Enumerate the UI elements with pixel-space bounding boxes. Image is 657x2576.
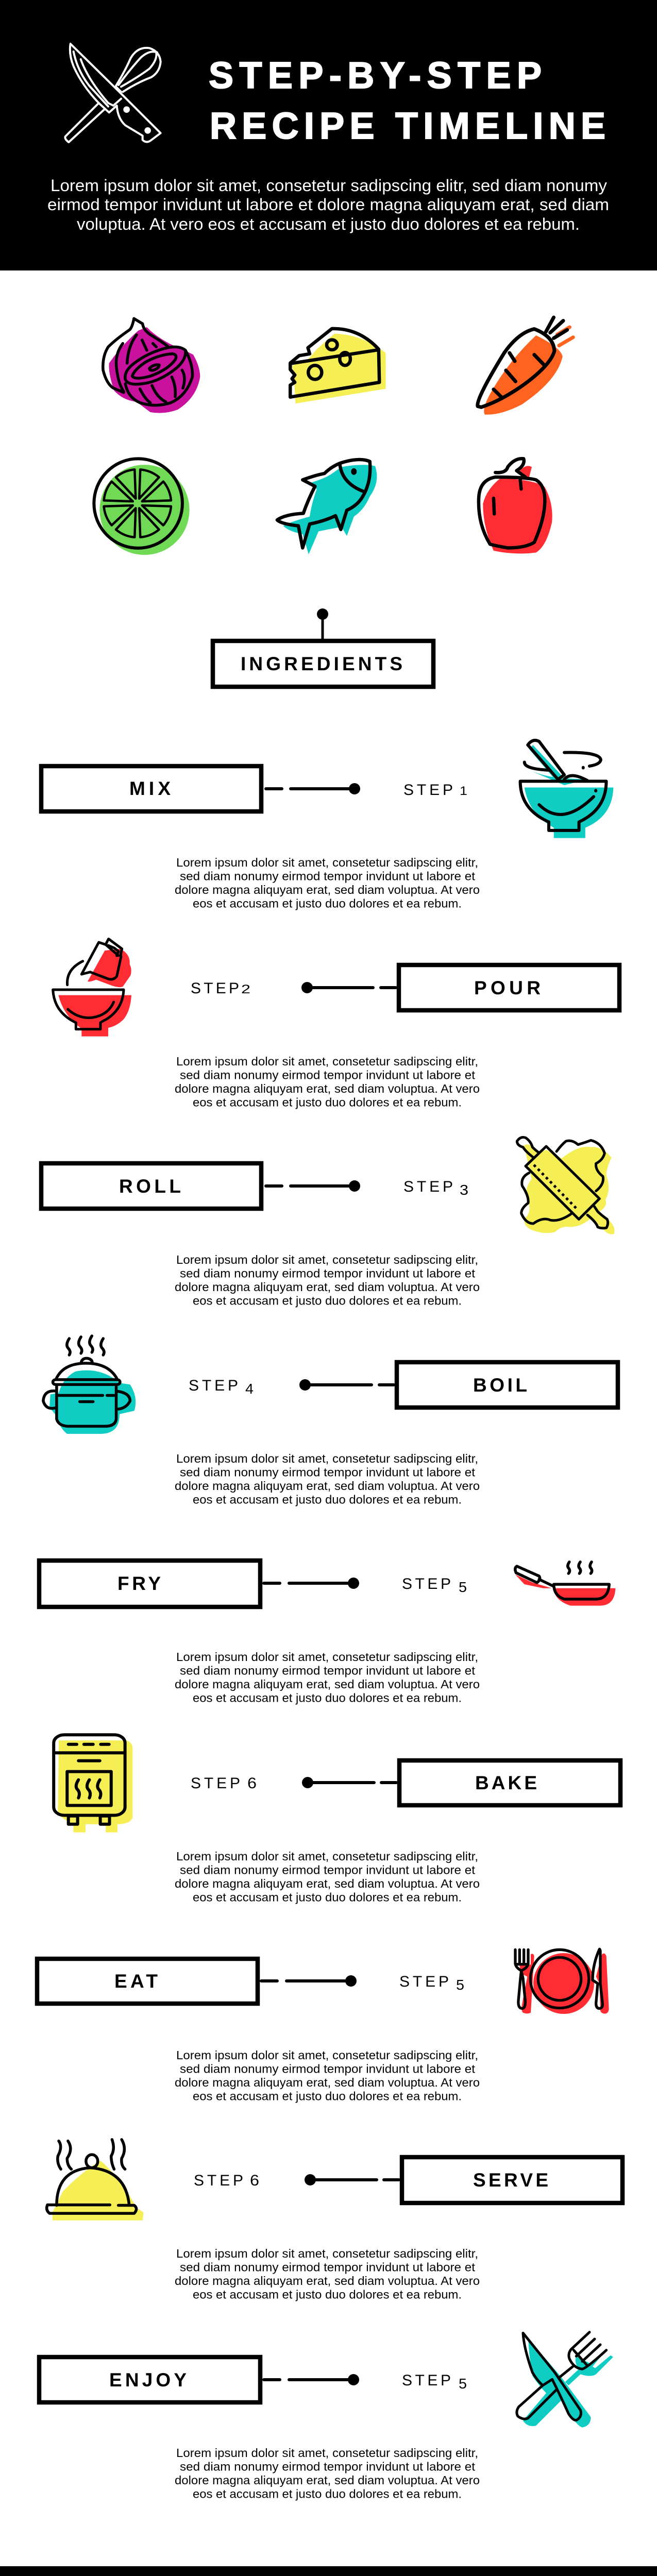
description: dolore magna aliquyam erat, sed diam voluptua. At vero: [175, 2076, 480, 2089]
label box: eat: EAT: [114, 1971, 158, 1992]
connector: [302, 1777, 396, 1788]
icon: oven: [54, 1735, 132, 1833]
description: [175, 856, 480, 910]
description: eos et accusam et justo duo dolores et ea rebum.: [193, 2288, 462, 2301]
step number: [403, 1178, 468, 1198]
label box: bake: BAKE: [475, 1772, 537, 1793]
step number: STEP: [191, 1775, 240, 1792]
description: eos et accusam et justo duo dolores et ea rebum.: [193, 897, 462, 910]
icon: bell pepper: [479, 459, 552, 553]
description: Lorem ipsum dolor sit amet, consetetur sadipscing elitr,: [176, 2048, 478, 2062]
step 9: enjoy: [39, 2332, 613, 2501]
description: eos et accusam et justo duo dolores et ea rebum.: [193, 2487, 462, 2501]
description: eos et accusam et justo duo dolores et ea rebum.: [193, 2090, 462, 2103]
label box: enjoy: ENJOY: [109, 2369, 187, 2391]
label box: fry: FRY: [117, 1573, 161, 1594]
step number: 3: [460, 1182, 468, 1198]
description: Lorem ipsum dolor sit amet, consetetur sadipscing elitr,: [176, 2247, 478, 2260]
intro text: voluptua. At vero eos et accusam et justo duo dolores et ea rebum.: [77, 215, 580, 233]
step number: STEP: [403, 1178, 453, 1195]
icon: plate with fork and knife: [515, 1949, 609, 2014]
title: STEP-BY-STEP: [209, 55, 542, 96]
description: dolore magna aliquyam erat, sed diam voluptua. At vero: [175, 2473, 480, 2487]
description: [175, 2048, 480, 2103]
description: [175, 2247, 480, 2301]
step number: [402, 2372, 467, 2392]
description: eos et accusam et justo duo dolores et ea rebum.: [193, 1691, 462, 1705]
label box: boil: [397, 1362, 618, 1408]
icon: serving cloche: [47, 2140, 143, 2221]
step number: STEP: [403, 782, 453, 799]
description: sed diam nonumy eirmod tempor invidunt ut labore et: [180, 2261, 476, 2274]
connector: [305, 2174, 399, 2185]
label box: enjoy: [39, 2357, 260, 2402]
description: dolore magna aliquyam erat, sed diam voluptua. At vero: [175, 1082, 480, 1095]
icon: onion: [103, 318, 200, 413]
step 2: pour: [53, 939, 619, 1109]
description: sed diam nonumy eirmod tempor invidunt ut labore et: [180, 1664, 476, 1677]
icon: cheese: [290, 329, 386, 403]
label box: pour: POUR: [474, 977, 541, 998]
title: RECIPE TIMELINE: [210, 106, 605, 147]
label box: fry: [39, 1561, 260, 1607]
description: eos et accusam et justo duo dolores et ea rebum.: [193, 1891, 462, 1904]
description: dolore magna aliquyam erat, sed diam voluptua. At vero: [175, 1877, 480, 1890]
description: eos et accusam et justo duo dolores et ea rebum.: [193, 1096, 462, 1109]
intro text: eirmod tempor invidunt ut labore et dolore magna aliquyam erat, sed diam: [47, 195, 609, 214]
description: [175, 1055, 480, 1109]
description: sed diam nonumy eirmod tempor invidunt ut labore et: [180, 1069, 476, 1082]
icon: crossed knife and fork: [517, 2332, 613, 2428]
step number: STEP: [402, 1575, 451, 1592]
description: dolore magna aliquyam erat, sed diam voluptua. At vero: [175, 2274, 480, 2287]
icon: carrot: [478, 317, 573, 415]
step 5: fry: [39, 1561, 615, 1705]
label box: pour: [399, 965, 619, 1010]
icon: pouring cup into bowl: [53, 939, 131, 1037]
icon: lime: [94, 459, 190, 555]
description: eos et accusam et justo duo dolores et ea rebum.: [193, 1493, 462, 1506]
description: eos et accusam et justo duo dolores et ea rebum.: [193, 1294, 462, 1308]
step 1: mix: [41, 740, 613, 910]
label box: roll: ROLL: [119, 1176, 181, 1197]
footer panel: [0, 2566, 657, 2576]
description: sed diam nonumy eirmod tempor invidunt ut labore et: [180, 1267, 476, 1280]
description: dolore magna aliquyam erat, sed diam voluptua. At vero: [175, 883, 480, 896]
intro text: Lorem ipsum dolor sit amet, consetetur sadipscing elitr, sed diam nonumy: [50, 176, 607, 195]
step 3: roll: [41, 1137, 615, 1308]
step number: 6: [250, 2172, 259, 2189]
ingredients heading: [213, 608, 433, 687]
description: dolore magna aliquyam erat, sed diam voluptua. At vero: [175, 1280, 480, 1294]
step 4: boil: [43, 1336, 618, 1506]
icon: rolling pin and dough: [517, 1137, 615, 1234]
step number: [402, 1575, 467, 1595]
step number: [189, 1377, 254, 1397]
step number: 4: [245, 1381, 254, 1397]
description: Lorem ipsum dolor sit amet, consetetur sadipscing elitr,: [176, 856, 478, 869]
icon: crossed knife and whisk: [65, 44, 161, 142]
label box: serve: [402, 2157, 622, 2203]
step number: STEP: [191, 980, 239, 997]
step number: 1: [460, 784, 467, 798]
description: sed diam nonumy eirmod tempor invidunt ut labore et: [180, 1466, 476, 1479]
description: sed diam nonumy eirmod tempor invidunt ut labore et: [180, 2460, 476, 2473]
step number: 2: [241, 982, 250, 996]
description: sed diam nonumy eirmod tempor invidunt ut labore et: [180, 870, 476, 883]
description: Lorem ipsum dolor sit amet, consetetur sadipscing elitr,: [176, 1452, 478, 1465]
label box: roll: [41, 1163, 261, 1209]
step number: STEP: [194, 2172, 243, 2189]
description: [175, 1253, 480, 1308]
step number: 5: [456, 1977, 464, 1993]
icon: boiling pot: [43, 1336, 136, 1434]
description: [175, 1650, 480, 1705]
label box: boil: BOIL: [473, 1375, 527, 1396]
step number: STEP: [399, 1973, 449, 1990]
step number: 6: [247, 1775, 257, 1792]
icon: mixing bowl: [520, 740, 613, 838]
description: Lorem ipsum dolor sit amet, consetetur sadipscing elitr,: [176, 1253, 478, 1266]
step number: 5: [459, 2376, 467, 2392]
intro text: [47, 176, 609, 233]
step 8: serve: [47, 2140, 622, 2301]
description: Lorem ipsum dolor sit amet, consetetur sadipscing elitr,: [176, 1850, 478, 1863]
connector: [266, 783, 360, 794]
label box: serve: SERVE: [473, 2170, 548, 2191]
description: sed diam nonumy eirmod tempor invidunt ut labore et: [180, 1863, 476, 1877]
description: dolore magna aliquyam erat, sed diam voluptua. At vero: [175, 1479, 480, 1493]
title: [209, 55, 605, 147]
step number: STEP: [402, 2372, 451, 2389]
description: [175, 2446, 480, 2501]
connector: [264, 2374, 359, 2385]
connector: [299, 1379, 394, 1391]
step number: STEP: [189, 1377, 238, 1394]
description: [175, 1452, 480, 1506]
description: dolore magna aliquyam erat, sed diam voluptua. At vero: [175, 1677, 480, 1691]
icon: fish: [277, 460, 377, 554]
step 6: bake: [54, 1735, 620, 1904]
connector: [266, 1180, 360, 1192]
label box: bake: [399, 1760, 620, 1805]
header panel: [0, 0, 657, 270]
label box: eat: [37, 1959, 258, 2004]
description: Lorem ipsum dolor sit amet, consetetur sadipscing elitr,: [176, 1055, 478, 1068]
icon: frying pan: [515, 1562, 615, 1606]
step number: [399, 1973, 464, 1993]
connector: [301, 982, 396, 993]
description: Lorem ipsum dolor sit amet, consetetur sadipscing elitr,: [176, 1650, 478, 1664]
step number: 5: [459, 1579, 467, 1595]
ingredients heading: INGREDIENTS: [241, 653, 402, 674]
connector: [264, 1578, 359, 1589]
description: [175, 1850, 480, 1904]
label box: mix: [41, 766, 261, 811]
description: Lorem ipsum dolor sit amet, consetetur sadipscing elitr,: [176, 2446, 478, 2460]
connector: [261, 1975, 357, 1987]
description: sed diam nonumy eirmod tempor invidunt ut labore et: [180, 2062, 476, 2076]
label box: mix: MIX: [129, 778, 171, 799]
step 7: eat: [37, 1949, 609, 2103]
panel: ingredient icons: [94, 317, 573, 555]
